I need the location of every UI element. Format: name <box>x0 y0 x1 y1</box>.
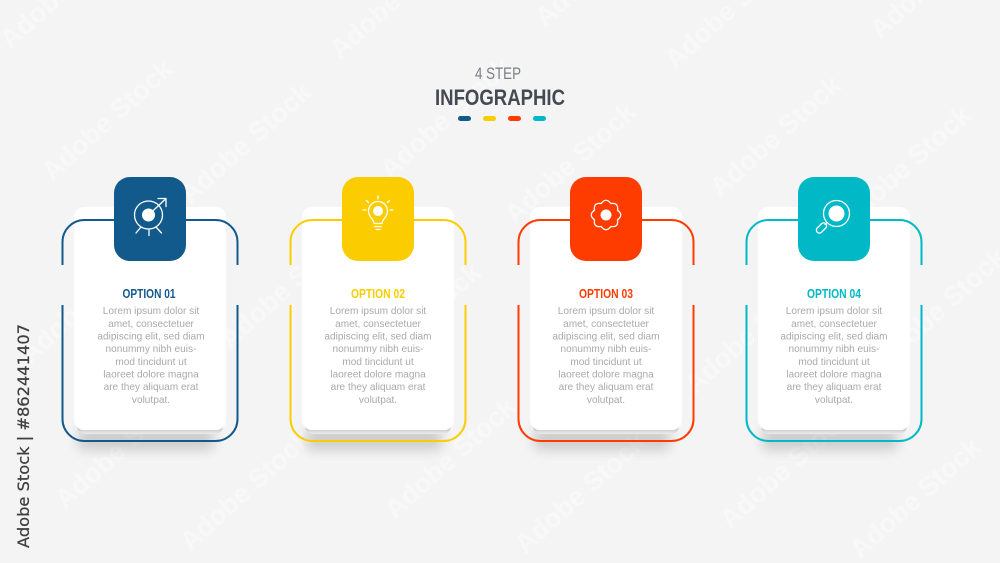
outline frame <box>518 220 694 441</box>
white card <box>758 207 910 430</box>
body text: amet, consectetuer <box>335 319 422 330</box>
white card <box>74 207 226 430</box>
title line: INFOGRAPHIC: INFOGRAPHIC <box>435 85 565 110</box>
body text: laoreet dolore magna <box>103 370 199 380</box>
panel: option 02 <box>290 177 466 450</box>
body text: adipiscing elit, sed diam <box>97 332 205 342</box>
watermark pattern: Adobe Stock <box>679 266 822 399</box>
body text: nonummy nibh euis- <box>789 344 879 355</box>
body text: are they aliquam erat <box>559 382 654 393</box>
watermark pattern: Adobe Stock <box>14 236 157 369</box>
watermark pattern: Adobe Stock <box>174 423 317 556</box>
watermark pattern: Adobe Stock <box>499 96 642 229</box>
body text <box>324 306 432 406</box>
icon tile <box>570 177 642 261</box>
body text <box>552 306 660 406</box>
body text: amet, consectetuer <box>563 319 650 330</box>
icon: magnifying glass <box>815 200 850 234</box>
card shadow <box>533 418 679 450</box>
body text: nonummy nibh euis- <box>561 344 651 355</box>
body text: Lorem ipsum dolor sit <box>786 306 882 317</box>
body text: mod tincidunt ut <box>798 357 870 368</box>
colour dashes <box>458 116 546 121</box>
card shadow <box>77 418 223 450</box>
body text: nonummy nibh euis- <box>333 344 423 355</box>
body text: Lorem ipsum dolor sit <box>103 306 199 317</box>
watermark pattern: Adobe Stock <box>704 69 847 202</box>
body text: are they aliquam erat <box>331 382 426 393</box>
watermark pattern: Adobe Stock <box>214 221 357 354</box>
watermark pattern: Adobe Stock <box>844 431 987 563</box>
watermark pattern: Adobe Stock <box>344 256 487 389</box>
white card <box>302 207 454 430</box>
body text: mod tincidunt ut <box>115 357 187 368</box>
body text: adipiscing elit, sed diam <box>780 332 888 342</box>
body text: adipiscing elit, sed diam <box>324 332 432 342</box>
watermark pattern: Adobe Stock <box>509 426 652 559</box>
body text: volutpat. <box>587 395 625 406</box>
icon tile <box>798 177 870 261</box>
body text: volutpat. <box>815 395 853 406</box>
body text: nonummy nibh euis- <box>106 344 196 355</box>
icon: target with arrow <box>134 198 166 236</box>
body text: amet, consectetuer <box>108 319 195 330</box>
icon tile <box>114 177 186 261</box>
icon: light bulb <box>363 196 393 230</box>
heading: OPTION 02 <box>351 287 405 301</box>
panel: option 01 <box>62 177 238 450</box>
body text: mod tincidunt ut <box>342 357 414 368</box>
outline frame <box>62 220 238 441</box>
outline frame <box>290 220 466 441</box>
body text: Lorem ipsum dolor sit <box>330 306 426 317</box>
outline frame <box>746 220 922 441</box>
body text: are they aliquam erat <box>104 382 199 393</box>
panel: option 03 <box>518 177 694 450</box>
title line: 4 STEP: 4 STEP <box>475 64 521 83</box>
icon tile <box>342 177 414 261</box>
body text: adipiscing elit, sed diam <box>552 332 660 342</box>
body text <box>97 306 205 406</box>
watermark pattern: Adobe Stock <box>174 76 317 209</box>
watermark pattern: Adobe Stock <box>834 99 977 232</box>
body text: mod tincidunt ut <box>570 357 642 368</box>
body text <box>780 306 888 406</box>
heading: OPTION 04 <box>807 287 861 301</box>
body text: amet, consectetuer <box>791 319 878 330</box>
body text: volutpat. <box>132 395 170 406</box>
body text: are they aliquam erat <box>787 382 882 393</box>
watermark pattern: Adobe Stock <box>379 391 522 524</box>
white card <box>530 207 682 430</box>
card shadow <box>761 418 907 450</box>
side credit text: Adobe Stock | #862441407 <box>14 324 33 548</box>
card shadow <box>305 418 451 450</box>
watermark pattern: Adobe Stock <box>374 51 517 184</box>
body text: laoreet dolore magna <box>786 370 882 380</box>
body text: volutpat. <box>359 395 397 406</box>
body text: Lorem ipsum dolor sit <box>558 306 654 317</box>
icon: gear badge <box>591 200 621 230</box>
heading: OPTION 03 <box>579 287 633 301</box>
panel: option 04 <box>746 177 922 450</box>
watermark pattern: Adobe Stock <box>36 53 179 186</box>
body text: laoreet dolore magna <box>330 370 426 380</box>
body text: laoreet dolore magna <box>558 370 654 380</box>
watermark pattern: Adobe Stock <box>544 231 687 364</box>
watermark pattern: Adobe Stock <box>714 401 857 534</box>
heading: OPTION 01 <box>122 287 176 301</box>
title: 4 step infographic <box>435 64 565 121</box>
watermark pattern: Adobe Stock <box>49 381 192 514</box>
